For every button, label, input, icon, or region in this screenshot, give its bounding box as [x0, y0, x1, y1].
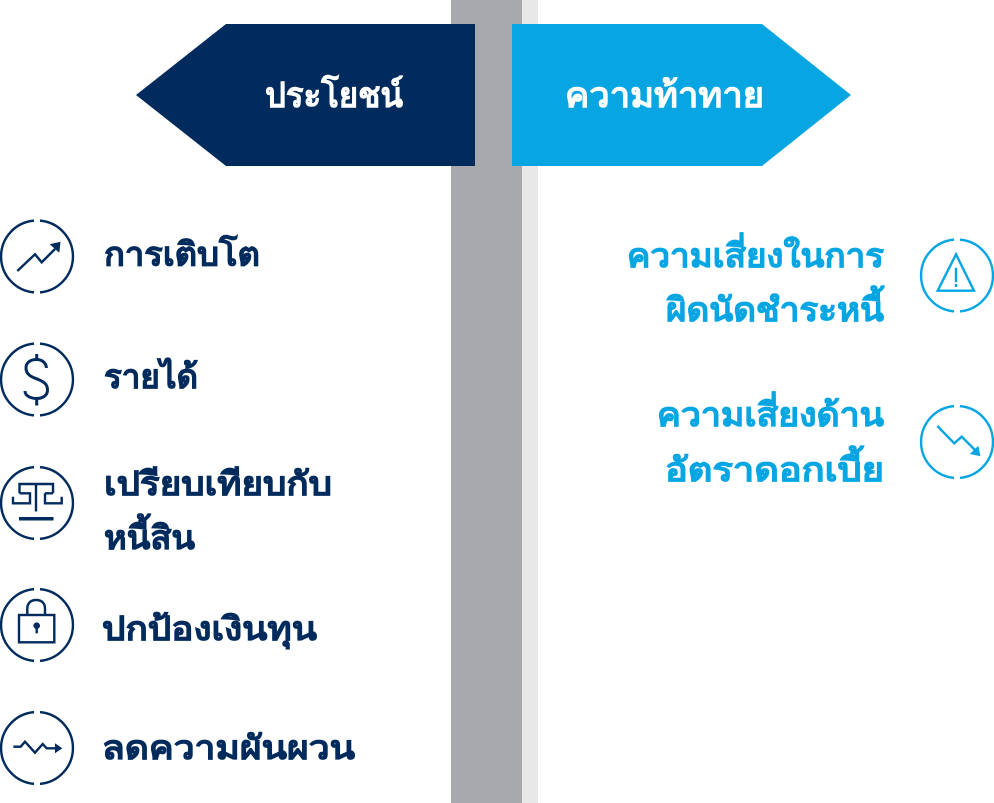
label: compared with debt	[104, 465, 332, 556]
label: growth: การเติบโต	[104, 234, 260, 272]
label: interest rate risk: ความเสี่ยงด้าน	[657, 391, 884, 433]
label: compared with debt: หนี้สิน	[104, 513, 195, 556]
signpost pole	[451, 0, 538, 803]
arrow sign: benefits	[136, 24, 475, 166]
label: reduced volatility: ลดความผันผวน	[102, 729, 355, 766]
label: interest rate risk	[657, 391, 884, 488]
icon: falling chart	[921, 406, 993, 478]
label: compared with debt: เปรียบเทียบกับ	[104, 465, 332, 502]
icon: padlock	[1, 589, 73, 661]
label: interest rate risk: อัตราดอกเบี้ย	[665, 445, 884, 488]
arrow sign: challenges	[512, 24, 851, 166]
label: default risk	[627, 232, 885, 328]
label: default risk: ความเสี่ยงในการ	[627, 232, 884, 274]
label: capital protection: ปกป้องเงินทุน	[102, 610, 317, 650]
arrow sign: challenges: ความท้าทาย	[565, 76, 764, 115]
arrow sign: benefits: ประโยชน์	[265, 74, 403, 115]
icon: balance scale	[1, 467, 73, 539]
label: default risk: ผิดนัดชำระหนี้	[666, 285, 885, 328]
icon: reduced volatility	[1, 712, 73, 784]
icon: dollar	[1, 344, 73, 415]
icon: warning triangle	[921, 240, 993, 311]
icon: growth chart	[1, 221, 73, 292]
label: income: รายได้	[104, 357, 198, 395]
